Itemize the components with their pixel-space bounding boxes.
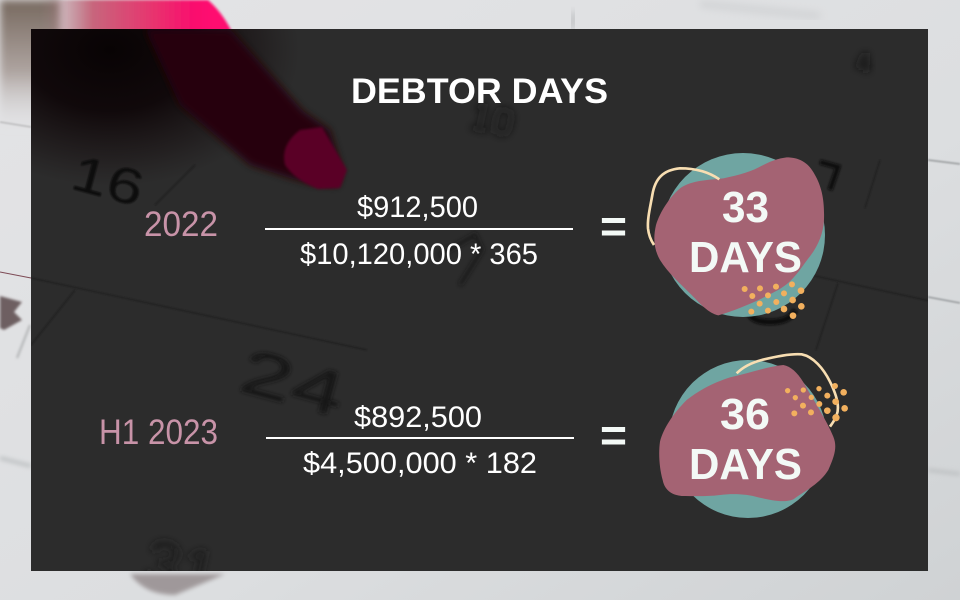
year label H1 2023: H1 2023 — [99, 413, 218, 452]
badge: 33 days: DAYS — [689, 233, 802, 282]
fraction H1 2023: $4,500,000 * 182 — [303, 447, 537, 480]
badge: 33 days: 33 — [722, 183, 769, 232]
badge: 36 days: 36 — [720, 390, 770, 439]
dark translucent panel: 16 — [66, 145, 150, 217]
dark translucent panel: 4 — [855, 47, 871, 78]
badge: 33 days — [648, 153, 825, 319]
fraction 2022 — [265, 191, 573, 271]
badge: 36 days — [659, 354, 848, 518]
dark translucent panel: 10 — [466, 94, 518, 146]
dark translucent panel: 24 — [233, 337, 352, 430]
fraction H1 2023 — [266, 401, 574, 480]
row: H1 2023 — [99, 354, 848, 518]
row: 2022 — [144, 153, 825, 319]
fraction 2022: $10,120,000 * 365 — [300, 238, 538, 271]
badge: 36 days: DAYS — [689, 440, 802, 489]
year label 2022: 2022 — [144, 205, 218, 244]
equals sign: = — [600, 200, 627, 252]
fraction H1 2023: $892,500 — [354, 401, 482, 434]
equals sign: = — [600, 409, 627, 461]
fraction 2022: $912,500 — [357, 191, 478, 224]
title: DEBTOR DAYS — [351, 72, 608, 111]
